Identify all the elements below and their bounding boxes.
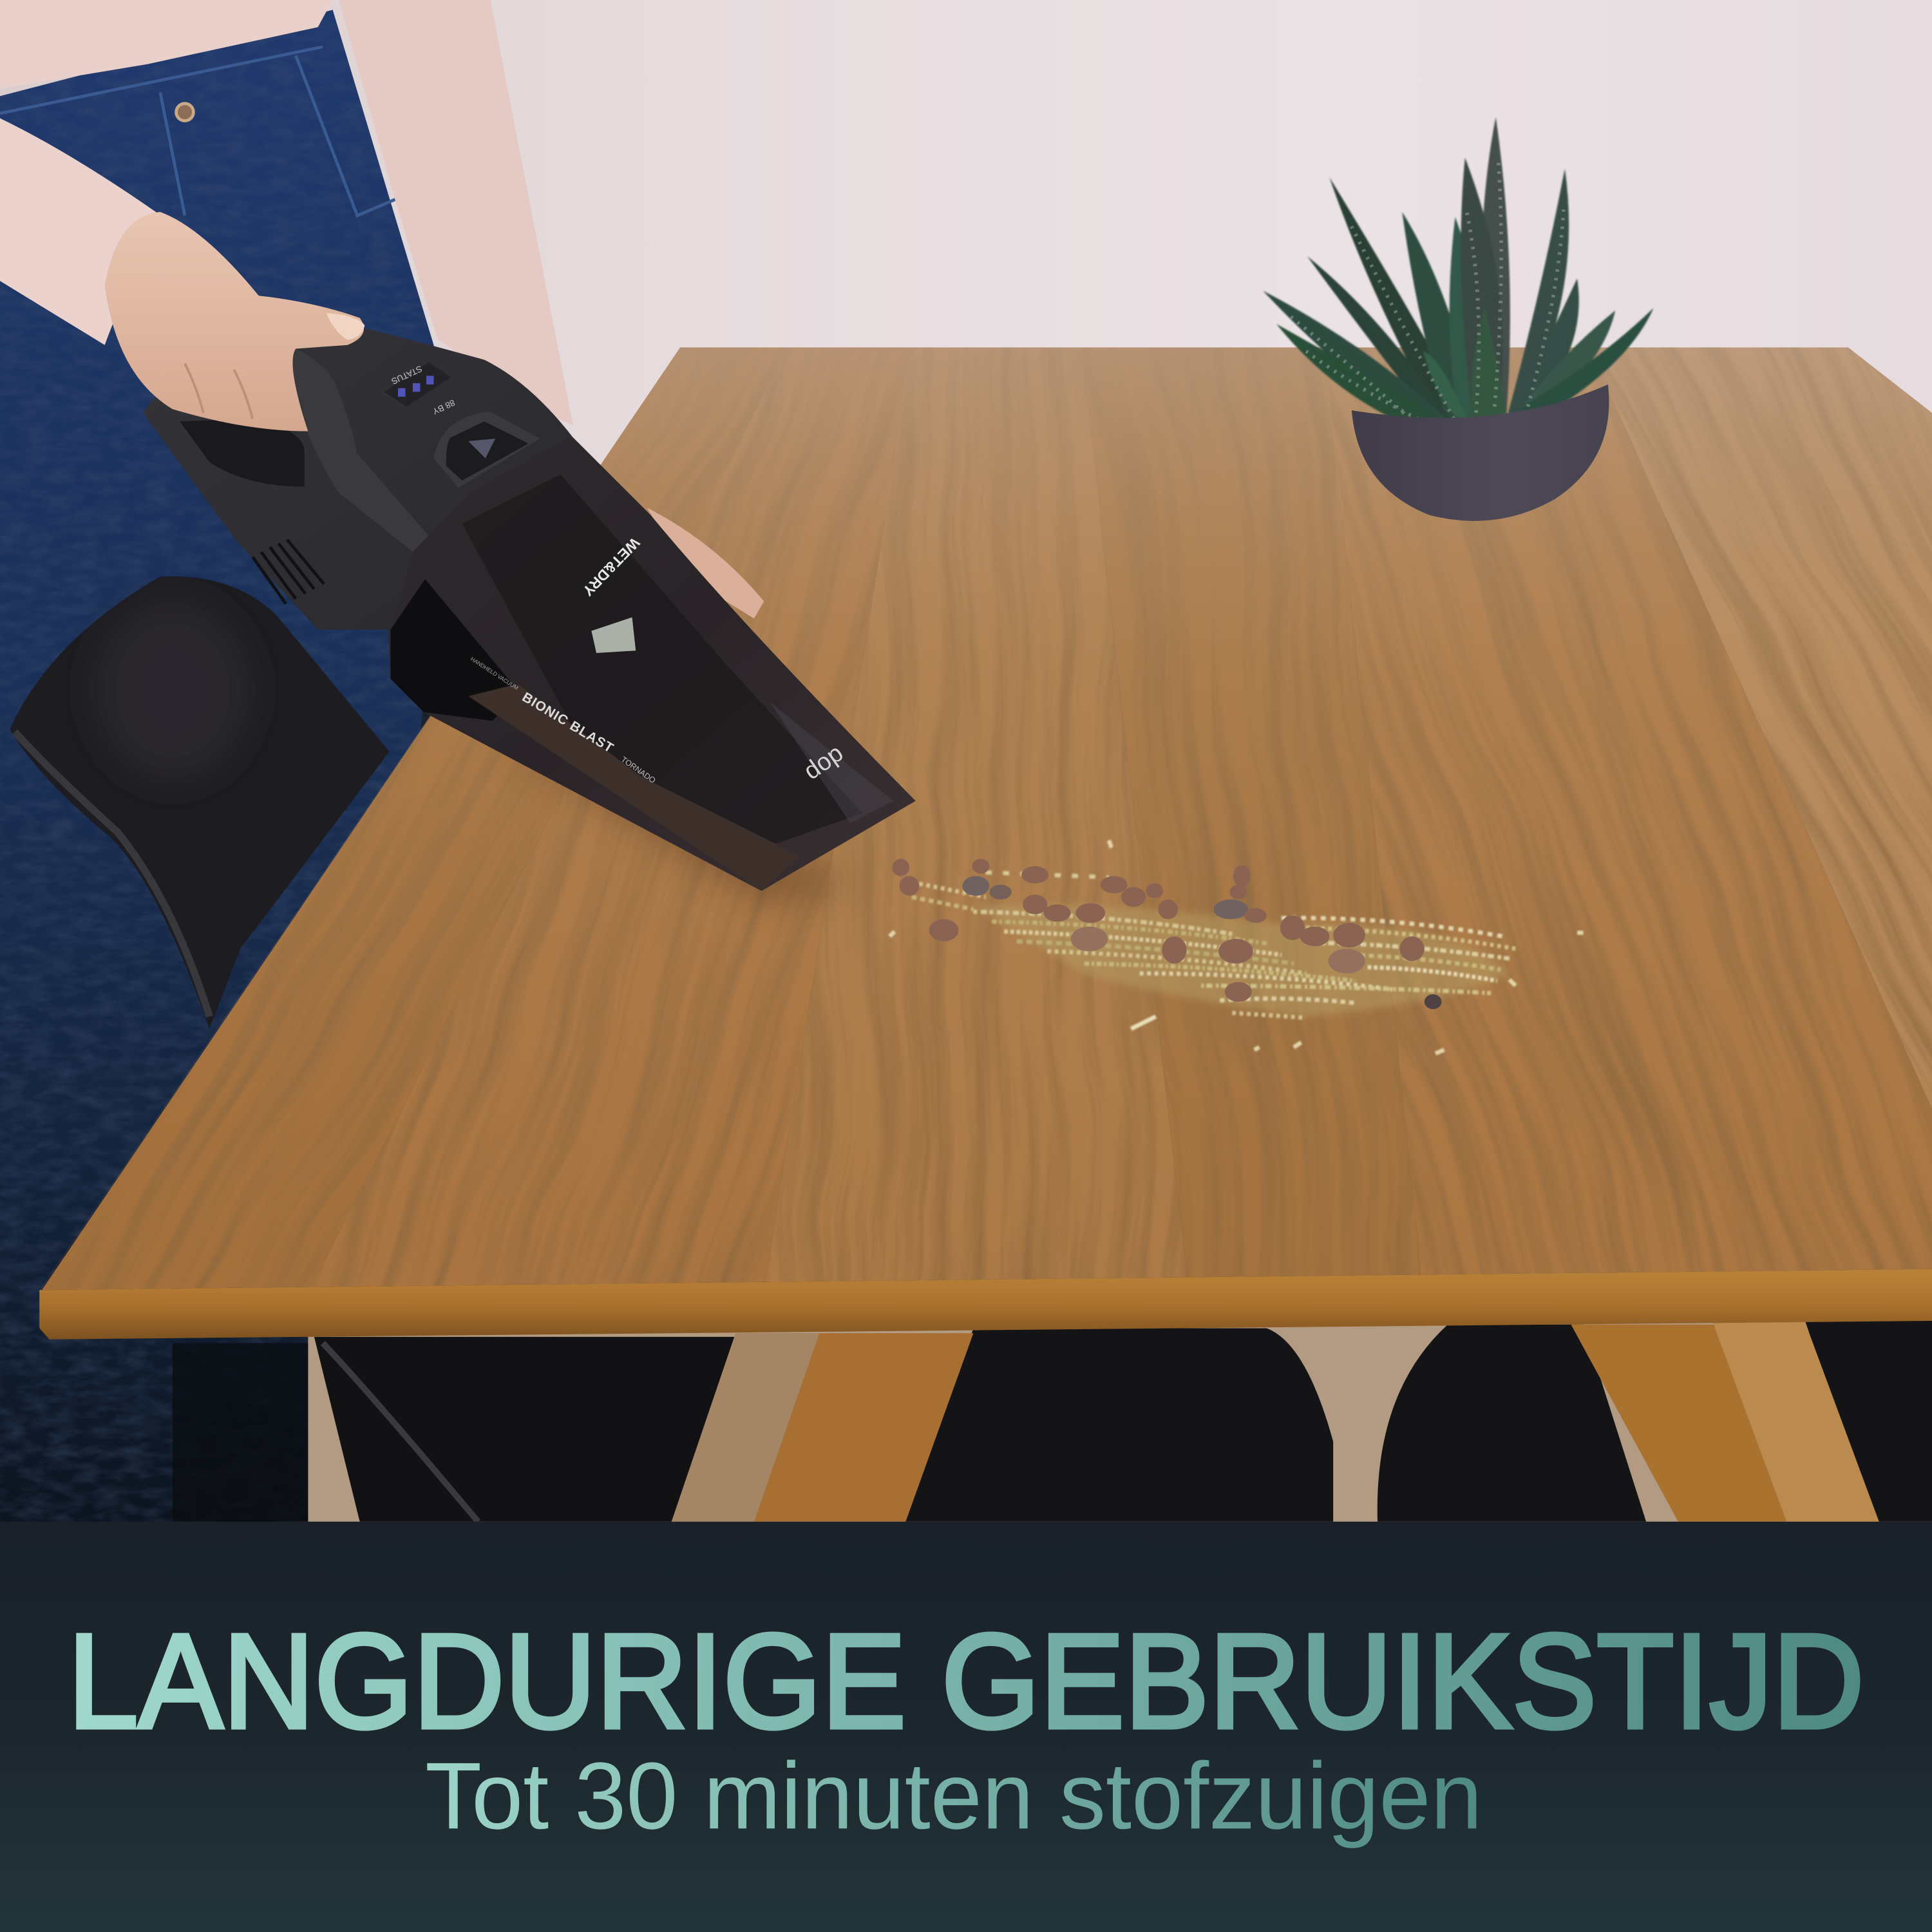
chair rim	[15, 732, 209, 1016]
person: waistband and pocket	[0, 47, 401, 216]
plant leaves	[1263, 117, 1654, 439]
hand vacuum	[143, 327, 916, 891]
holding hand	[105, 212, 365, 431]
subtitle: Tot 30 minuten stofzuigen	[425, 1743, 1482, 1849]
tank inner column	[462, 475, 862, 850]
handle grip	[263, 333, 429, 552]
nozzle highlight	[770, 703, 893, 823]
button surround	[433, 412, 540, 488]
photo scene	[0, 0, 1932, 1528]
chair seat left	[314, 1337, 739, 1522]
debris flecks	[889, 840, 1584, 1054]
table light falloff	[0, 348, 1932, 1296]
wood grain	[0, 348, 1932, 1296]
handle opening	[180, 420, 305, 487]
far hand under vacuum	[647, 507, 764, 618]
status lights	[398, 376, 433, 397]
band background	[0, 1522, 1932, 1932]
title: LANGDURIGE GEBRUIKSTIJD	[68, 1606, 1864, 1756]
button arrow	[468, 439, 495, 459]
bionic blast label: BIONIC BLAST	[520, 690, 616, 755]
person: sweater	[0, 0, 573, 425]
debris shadow patch	[973, 904, 1510, 1016]
release button	[433, 412, 540, 488]
vent slots	[252, 540, 324, 604]
tank brown lower band	[468, 684, 801, 891]
person: jeans texture	[0, 10, 446, 1522]
tornado label: TORNADO	[620, 755, 658, 785]
status background	[384, 362, 451, 406]
wall	[0, 0, 1932, 518]
filter brush	[591, 618, 636, 653]
vacuum shadow on table	[493, 739, 850, 905]
plant	[1263, 117, 1654, 521]
chair highlight	[92, 598, 252, 782]
chair rim left	[323, 1343, 478, 1522]
transparent dust tank	[391, 437, 916, 891]
chair back	[10, 576, 390, 1029]
hand shape	[105, 212, 364, 431]
person: lower leg shadow	[173, 1343, 308, 1522]
chair seat middle	[905, 1328, 1333, 1522]
floor	[293, 1318, 1932, 1528]
status label: STATUS	[390, 364, 424, 386]
table front edge	[39, 1269, 1932, 1340]
table legs	[672, 1322, 1879, 1522]
debris pebbles	[892, 859, 1442, 1009]
person: jeans	[0, 10, 446, 1522]
table top	[0, 348, 1932, 1296]
status panel	[384, 362, 457, 417]
chair far right	[1805, 1321, 1932, 1522]
wet and dry label: WET&DRY	[580, 535, 643, 600]
plant stripes	[1287, 160, 1564, 431]
chairs under table	[314, 1321, 1932, 1522]
plant pot	[1352, 384, 1609, 521]
debris pile	[889, 840, 1584, 1054]
caption band	[0, 1522, 1932, 1932]
brand logo: dop	[800, 741, 850, 788]
finger creases	[185, 363, 252, 419]
handheld vacuum label: HANDHELD VACUUM	[469, 656, 520, 691]
button face	[446, 421, 529, 480]
battery label: 88 BY	[431, 397, 457, 417]
vacuum silhouette	[143, 327, 916, 891]
chair seat right	[1378, 1325, 1646, 1522]
wood planks	[39, 348, 1932, 1294]
tank black base	[391, 579, 518, 721]
thumb nail	[327, 313, 365, 340]
